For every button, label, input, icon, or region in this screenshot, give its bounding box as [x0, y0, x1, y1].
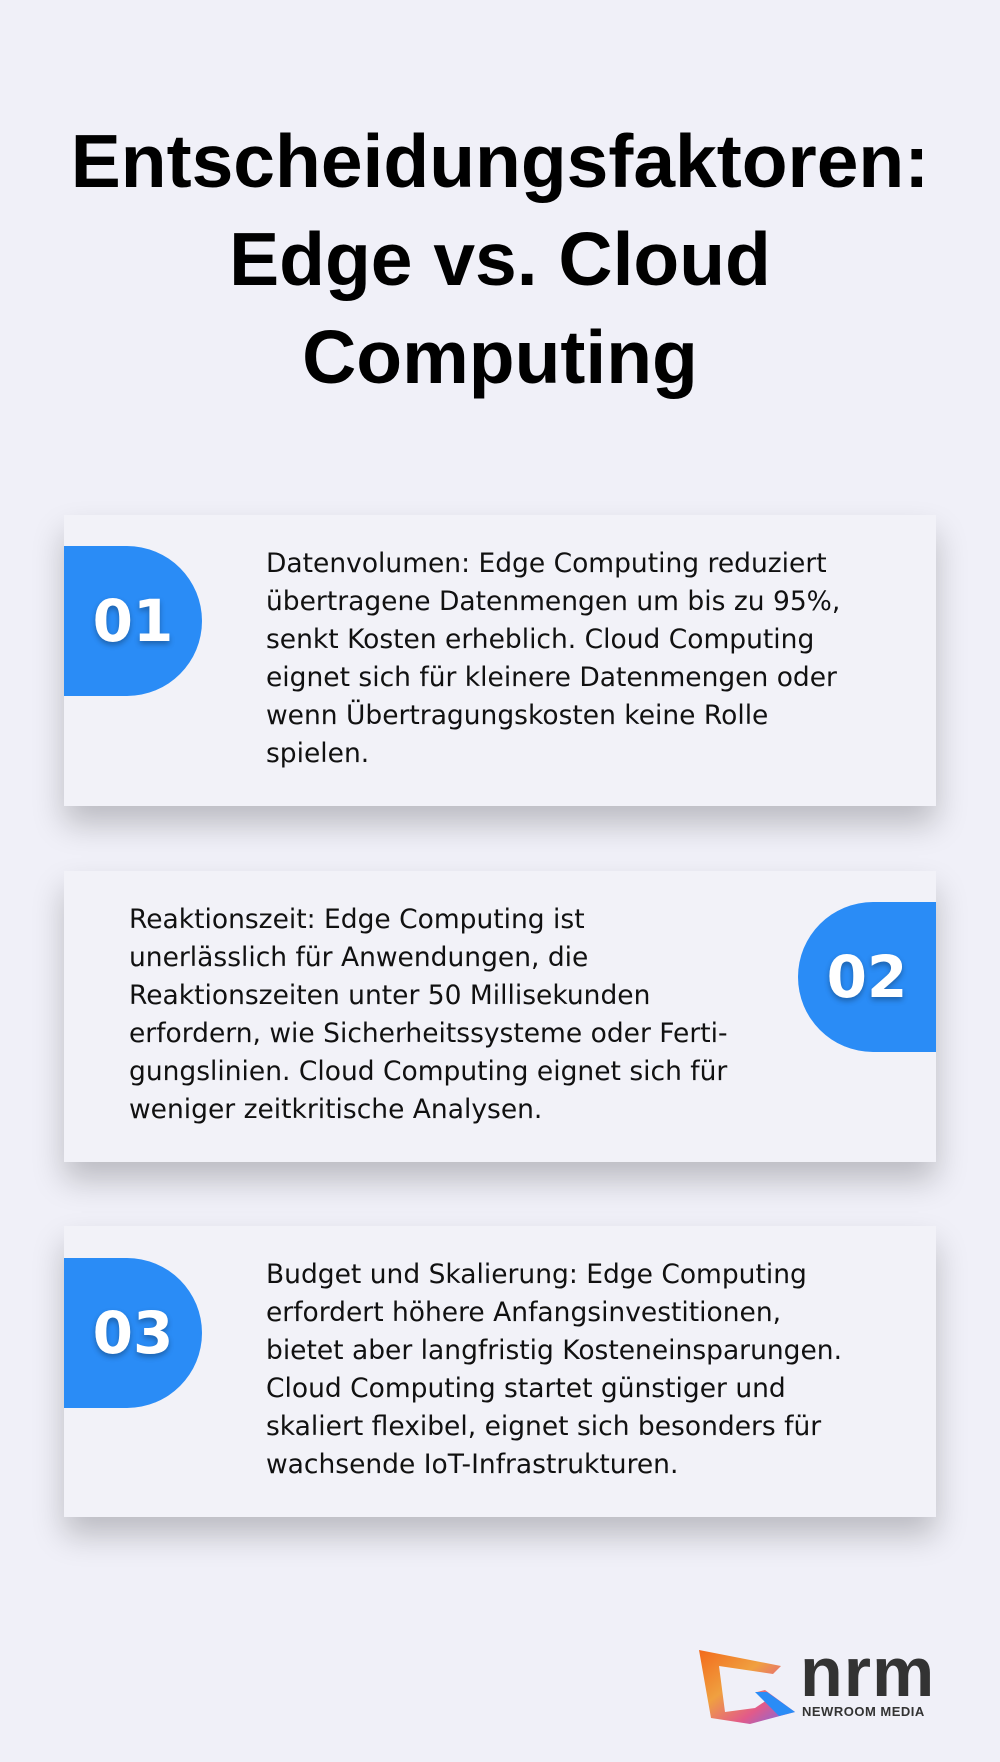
text block 3: Budget und Skalierung: Edge Computing [266, 1259, 807, 1290]
text block 2: Reaktionszeiten unter 50 Millisekunden [129, 980, 650, 1011]
badge 03 [64, 1258, 202, 1408]
title: Edge vs. Cloud [229, 217, 771, 301]
logo [699, 1633, 935, 1724]
text block 3: skaliert flexibel, eignet sich besonders für [266, 1411, 821, 1442]
panel: card 1 [64, 515, 936, 806]
title: Entscheidungsfaktoren: [71, 119, 929, 203]
text block 2: gungslinien. Cloud Computing eignet sich für [129, 1056, 727, 1087]
text block 2: weniger zeitkritische Analysen. [129, 1094, 542, 1125]
title: Computing [302, 315, 698, 399]
badge 02 [798, 902, 936, 1052]
text block 3: wachsende IoT-Infrastrukturen. [266, 1449, 678, 1480]
badge 01 [64, 546, 202, 696]
text block 3: bietet aber langfristig Kosteneinsparungen. [266, 1335, 842, 1366]
text block 3: Cloud Computing startet günstiger und [266, 1373, 786, 1404]
text block 1: spielen. [266, 738, 369, 769]
title [71, 119, 929, 399]
badge 02: 02 [827, 943, 907, 1011]
panel: card 3 [64, 1226, 936, 1517]
logo: NEWROOM MEDIA [802, 1704, 925, 1719]
text block 1: wenn Übertragungskosten keine Rolle [266, 700, 768, 731]
badge 03: 03 [93, 1299, 173, 1367]
icon: logo mark [699, 1650, 795, 1724]
text block 1 [266, 548, 840, 769]
text block 2: unerlässlich für Anwendungen, die [129, 942, 588, 973]
panel: card 2 [64, 871, 936, 1162]
text block 2: Reaktionszeit: Edge Computing ist [129, 904, 585, 935]
badge 01: 01 [93, 587, 173, 655]
text block 1: übertragene Datenmengen um bis zu 95%, [266, 586, 840, 617]
text block 2 [129, 904, 728, 1125]
text block 3: erfordert höhere Anfangsinvestitionen, [266, 1297, 781, 1328]
text block 2: erfordern, wie Sicherheitssysteme oder Ferti- [129, 1018, 728, 1049]
brand text: nrm [800, 1633, 935, 1711]
text block 1: senkt Kosten erheblich. Cloud Computing [266, 624, 814, 655]
text block 3 [266, 1259, 842, 1480]
text block 1: eignet sich für kleinere Datenmengen oder [266, 662, 837, 693]
text block 1: Datenvolumen: Edge Computing reduziert [266, 548, 827, 579]
